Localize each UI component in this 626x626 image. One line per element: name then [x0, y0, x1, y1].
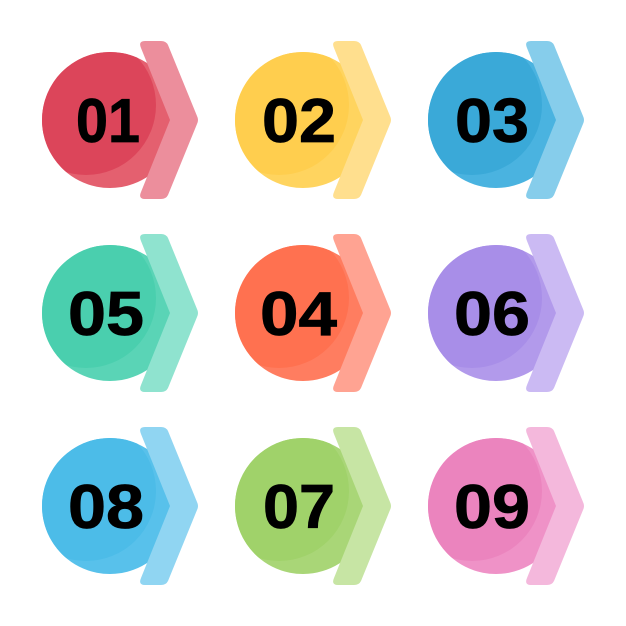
badge 06 [428, 234, 584, 392]
badge 09: 09 [454, 473, 530, 542]
badge 03: 03 [455, 87, 529, 156]
badge 08 [42, 427, 198, 585]
infographic: numbered badge grid [42, 41, 584, 585]
badge 05: 05 [68, 280, 144, 349]
badge 05 [42, 234, 198, 392]
badge 02: 02 [262, 87, 336, 156]
badge 01 [42, 41, 198, 199]
badge 03 [428, 41, 584, 199]
badge 09 [428, 427, 584, 585]
badge 08: 08 [68, 473, 144, 542]
badge 02 [235, 41, 391, 199]
badge 01: 01 [76, 87, 140, 156]
badge 07 [235, 427, 391, 585]
badge 04 [235, 234, 391, 392]
badge 06: 06 [454, 280, 530, 349]
badge 07: 07 [263, 473, 335, 542]
badge 04: 04 [260, 280, 338, 349]
